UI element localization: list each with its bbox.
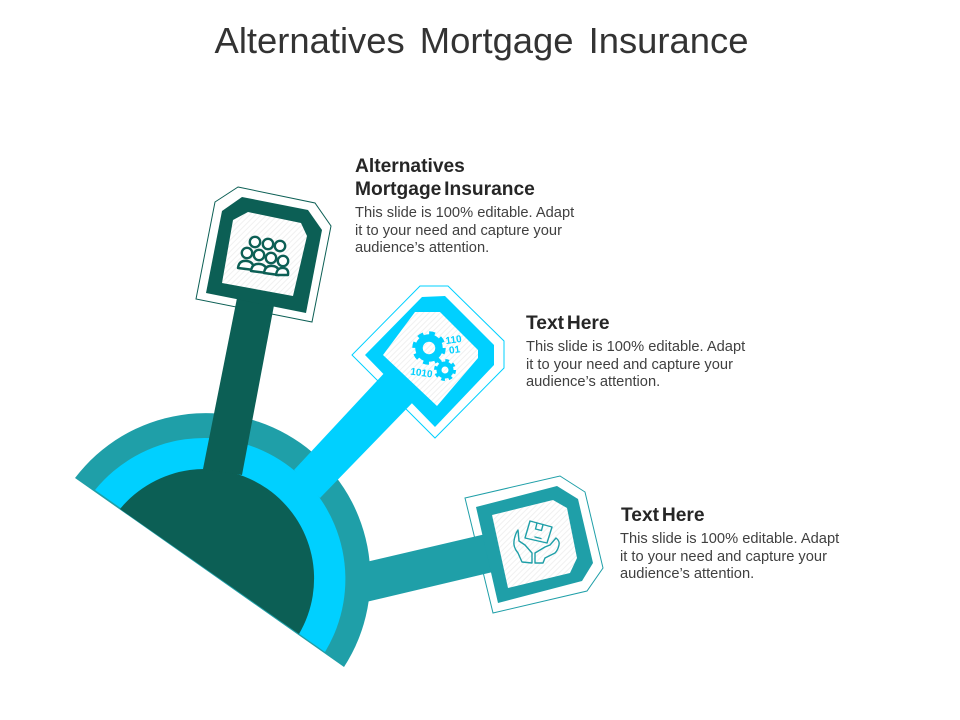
icon: people group [238,237,288,275]
body 2: it to your need and capture your [526,356,733,372]
node 1: people [206,197,322,313]
body 3: audience’s attention. [620,566,754,582]
heading 1 [355,156,535,200]
heading 3: Text Here [621,505,705,526]
node 2: gears [365,296,494,427]
outline: node 2 [352,286,504,438]
title: Alternatives Mortgage Insurance [215,20,748,61]
heading 1: Alternatives [355,156,465,177]
outer semicircle [75,413,370,667]
icon: gears and binary: 01 [448,344,461,357]
icon: gears and binary: 110 [445,334,463,347]
icon: hands holding box [514,521,559,563]
heading 1: Mortgage Insurance [355,179,535,200]
body 1: it to your need and capture your [355,222,562,238]
outline: node 1 [196,187,331,322]
body 2: audience’s attention. [526,374,660,390]
body 1 [355,205,574,256]
inner semicircle [120,469,314,634]
body 3 [620,531,840,582]
icon: gears and binary: 1010 [410,367,434,381]
middle semicircle [95,438,345,652]
icon: gears and binary [410,334,463,381]
outline: node 3 [465,476,603,613]
heading 2: Text Here [526,313,610,334]
body 3: it to your need and capture your [620,548,827,564]
text block 1 [355,156,574,256]
body 3: This slide is 100% editable. Adapt [620,531,839,547]
text block 2 [526,313,746,390]
body 2 [526,339,746,390]
body 1: audience’s attention. [355,240,489,256]
body 2: This slide is 100% editable. Adapt [526,339,745,355]
cyan stem [294,369,417,498]
body 1: This slide is 100% editable. Adapt [355,205,574,221]
dark stem [203,293,275,475]
node 3: hands and box [476,486,593,603]
text block 3 [620,505,840,582]
teal stem [366,533,497,602]
